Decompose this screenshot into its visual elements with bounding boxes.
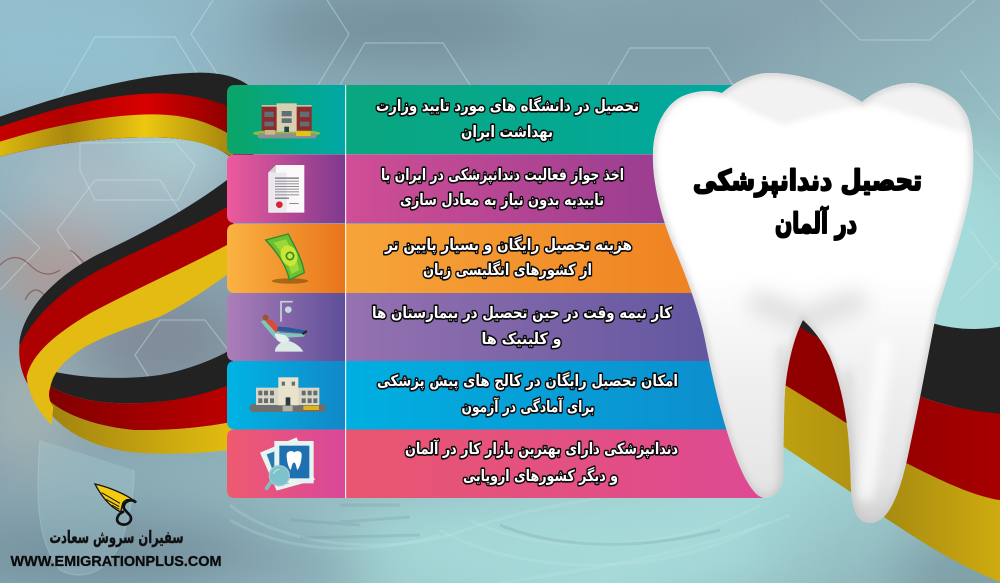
- title: در آلمان: [775, 206, 857, 240]
- row text 6: [405, 439, 678, 486]
- German flag ribbon, lower loop: [48, 348, 233, 454]
- row 3 background: [227, 224, 730, 293]
- icon: university building: [253, 103, 320, 138]
- German flag ribbon, top arc: [0, 73, 253, 160]
- row text 2: تاییدیه بدون نیاز به معادل سازی: [400, 191, 604, 209]
- icon: preparatory college building: [249, 377, 326, 412]
- row text 1: بهداشت ایران: [461, 123, 553, 141]
- title: [693, 164, 922, 240]
- logo text: company name: سفیران سروش سعادت: [50, 528, 184, 548]
- row text 1: تحصیل در دانشگاه های مورد تایید وزارت: [376, 96, 639, 115]
- row text 4: [372, 304, 673, 348]
- title: تحصیل دندانپزشکی: [693, 164, 922, 197]
- icon: banknote: [266, 234, 308, 284]
- row text 1: [376, 96, 639, 141]
- German flag ribbon, middle diagonal: [19, 175, 233, 425]
- row 2 background: [227, 154, 730, 223]
- website address: WWW.EMIGRATIONPLUS.COM: [10, 554, 222, 570]
- row text 2: اخذ جواز فعالیت دندانپزشکی در ایران با: [381, 166, 624, 185]
- icon: certificate document: [268, 165, 304, 213]
- row text 6: و دیگر کشورهای اروپایی: [463, 466, 618, 486]
- row text 3: هزینه تحصیل رایگان و بسیار پایین تر: [384, 235, 632, 255]
- row text 3: از کشورهای انگلیسی زبان: [423, 260, 592, 279]
- tooth illustration: [653, 60, 985, 523]
- German flag ribbon, right side: [783, 319, 1000, 583]
- row text 5: امکان تحصیل رایگان در کالج های پیش پزشکی: [377, 371, 678, 391]
- row 4 background: [227, 293, 730, 361]
- row text 4: و کلینیک ها: [482, 330, 562, 348]
- row text 5: برای آمادگی در آزمون: [462, 397, 594, 416]
- logo: winged S emblem: [95, 484, 136, 525]
- row 1 background: [227, 85, 745, 154]
- row 6 background: [227, 430, 765, 498]
- row text 4: کار نیمه وقت در حین تحصیل در بیمارستان ها: [372, 304, 673, 322]
- row text 2: [381, 166, 624, 209]
- icon: dental x-ray with magnifier: [260, 437, 315, 491]
- row text 5: [377, 371, 678, 416]
- row text 3: [384, 235, 632, 279]
- panel: six coloured benefit rows: [227, 85, 765, 498]
- row text 6: دندانپزشکی دارای بهترین بازار کار در آلمان: [405, 439, 678, 459]
- icon: dental chair: [261, 302, 307, 352]
- row 5 background: [227, 361, 730, 430]
